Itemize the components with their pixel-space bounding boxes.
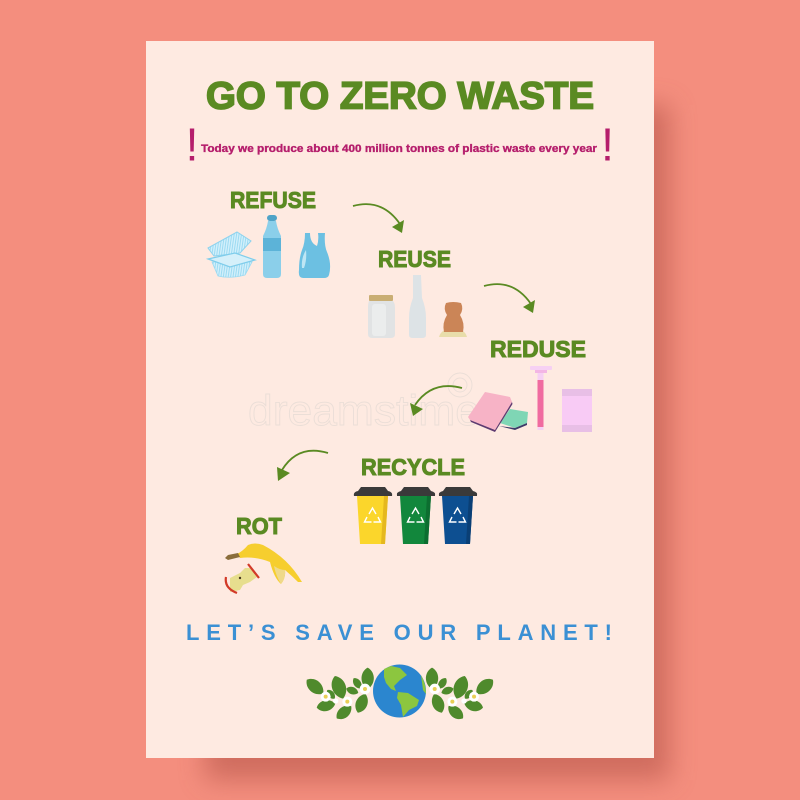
exclamation mark right: !: [601, 118, 614, 170]
icon: wooden brush: [439, 302, 467, 337]
statistic text: Today we produce about 400 million tonnes of plastic waste every year: [201, 143, 598, 155]
heading reduse: REDUSE: [490, 336, 586, 362]
icon: plastic bag: [299, 233, 330, 278]
icon: right leaves: [426, 668, 497, 723]
subtitle: [186, 118, 614, 170]
heading refuse: REFUSE: [230, 187, 316, 213]
heading rot: ROT: [236, 513, 283, 539]
icon: green sponge: [499, 409, 528, 430]
icon: yellow bin: [354, 487, 392, 544]
icon: glass jar: [368, 295, 395, 338]
arrow: refuse to reuse: [353, 204, 404, 233]
title: GO TO ZERO WASTE: [206, 76, 594, 118]
arrow: recycle to rot: [277, 451, 328, 481]
step: recycle: [354, 454, 477, 544]
icon: apple core: [226, 564, 259, 593]
icon: plastic bottle: [263, 215, 281, 278]
poster shadow: [205, 105, 670, 780]
heading recycle: RECYCLE: [361, 454, 465, 480]
arrow: reduse to recycle: [410, 386, 462, 416]
heading reuse: REUSE: [378, 246, 451, 272]
icon: soap package: [562, 389, 592, 432]
icon: glass bottle: [409, 275, 426, 338]
icon: green bin: [397, 487, 435, 544]
icon: banana peel: [225, 544, 302, 584]
icon: left leaves: [303, 668, 374, 723]
icon: pink sponge: [468, 392, 512, 432]
step: reduse: [468, 336, 592, 432]
step: rot: [225, 513, 302, 593]
closing slogan: LET’S SAVE OUR PLANET!: [186, 620, 612, 645]
step: reuse: [368, 246, 467, 338]
arrow: reuse to reduse: [484, 284, 535, 313]
icon: earth globe: [373, 664, 426, 718]
icon: plastic food container: [208, 232, 255, 277]
icon: razor: [530, 366, 552, 430]
step: refuse: [208, 187, 330, 278]
globe with leaves: [303, 664, 497, 723]
exclamation mark left: !: [186, 118, 198, 170]
icon: blue bin: [439, 487, 477, 544]
watermark: dreamstime: [248, 387, 480, 435]
poster panel: [146, 41, 654, 758]
